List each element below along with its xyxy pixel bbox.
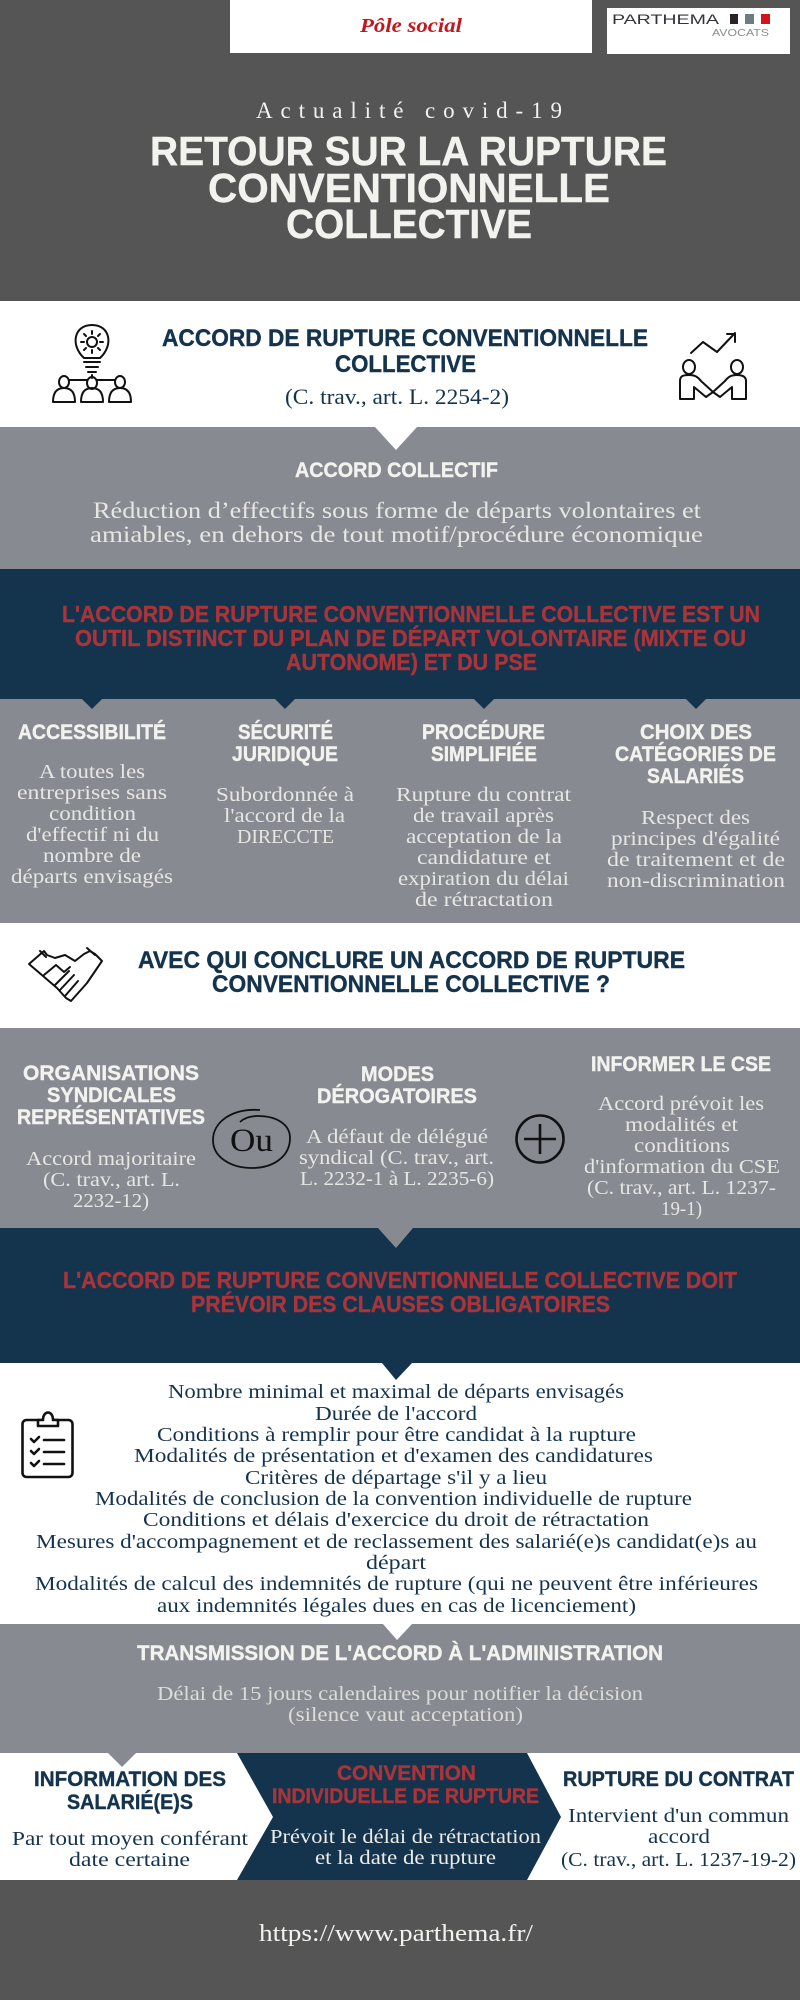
text block: clauses: Modalités de calcul des indemnités de rupture (qui ne peuvent être inférieures [35,1573,758,1595]
column: choix des catégories: de traitement et de [607,849,785,871]
column: accessibilité: départs envisagés [11,866,173,888]
column: sécurité juridique: SÉCURITÉ [238,721,333,744]
arrow: white pointer [375,427,417,450]
text block: (silence vaut acceptation) [288,1704,523,1726]
panel: parties à l'accord [0,1028,800,1228]
text block: clauses: départ [366,1552,427,1574]
column: choix des catégories: CHOIX DES [640,721,752,744]
title [150,128,667,247]
icon: light bulb and team [53,325,131,402]
text block: clauses: Modalités de conclusion de la convention individuelle de rupture [95,1488,692,1510]
title: CONVENTIONNELLE [208,165,610,211]
column: modes dérogatoires [299,1063,494,1190]
heading: AVEC QUI CONCLURE UN ACCORD DE RUPTURE [138,947,685,974]
arrow: grey pointer [378,1228,413,1248]
text block: clauses: aux indemnités légales dues en cas de licenciement) [157,1595,636,1617]
text block: clauses: Nombre minimal et maximal de départs envisagés [168,1381,624,1403]
column: procédure simplifiée [396,721,572,911]
step: information des salariés: SALARIÉ(E)S [67,1791,193,1814]
step: rupture du contrat [561,1768,796,1871]
column: accessibilité: A toutes les [39,761,145,783]
column: procédure simplifiée: acceptation de la [406,826,562,848]
panel: process steps [0,1753,800,1880]
column: procédure simplifiée: expiration du délai [398,868,570,890]
arrow: navy pointer [382,1363,412,1380]
step: convention individuelle de rupture: Prévoit le délai de rétractation [270,1826,541,1848]
column: accessibilité: d'effectif ni du [26,824,159,846]
column: informer le CSE [584,1053,780,1220]
heading: OUTIL DISTINCT DU PLAN DE DÉPART VOLONTAIRE (MIXTE OU [75,624,746,651]
column: modes dérogatoires: L. 2232-1 à L. 2235-6) [300,1168,494,1190]
text block: amiables, en dehors de tout motif/procédure économique [90,522,703,548]
column: sécurité juridique: DIRECCTE [237,826,334,848]
text block: clauses: Critères de départage s'il y a lieu [245,1467,547,1489]
column: accessibilité [11,721,173,888]
panel: footer [0,1880,800,2000]
kicker: Actualité covid-19: Actualité covid-19 [256,98,562,123]
column: sécurité juridique: JURIDIQUE [232,743,338,766]
column: organisations syndicales: REPRÉSENTATIVES [17,1106,205,1129]
heading: COLLECTIVE [335,351,476,378]
panel: clauses obligatoires [0,1228,800,1363]
panel: accord de rupture conventionnelle collective [0,301,800,427]
heading: PRÉVOIR DES CLAUSES OBLIGATOIRES [191,1290,610,1317]
text block: Délai de 15 jours calendaires pour notifier la décision [157,1683,643,1705]
text block [90,498,703,548]
column: choix des catégories: Respect des [641,807,750,829]
text block: clauses: Mesures d'accompagnement et de reclassement des salarié(e)s candidat(e)s au [36,1531,757,1553]
column: modes dérogatoires: DÉROGATOIRES [317,1085,477,1108]
step: information des salariés [12,1768,249,1871]
text block: clauses: Conditions et délais d'exercice du droit de rétractation [143,1509,649,1531]
panel: avec qui conclure [0,923,800,1027]
column: modes dérogatoires: MODES [361,1063,434,1086]
icon: clipboard checklist [22,1412,72,1477]
column: organisations syndicales: Accord majoritaire [26,1148,196,1170]
heading [162,325,648,378]
panel: transmission à l'administration [0,1624,800,1753]
legal reference: (C. trav., art. L. 2254-2) [285,384,509,409]
text block: Réduction d’effectifs sous forme de départs volontaires et [93,498,702,524]
column: organisations syndicales [17,1062,205,1212]
column: informer le CSE: d'information du CSE [584,1156,780,1178]
column: accessibilité: ACCESSIBILITÉ [18,721,166,744]
column: informer le CSE: Accord prévoit les [598,1093,764,1115]
heading: AUTONOME) ET DU PSE [286,649,537,675]
website link: https://www.parthema.fr/ [259,1921,533,1947]
text block: clauses: Durée de l'accord [315,1403,477,1425]
column: procédure simplifiée: candidature et [417,847,552,869]
text block: clauses: Modalités de présentation et d'examen des candidatures [134,1445,653,1467]
column: procédure simplifiée: de travail après [413,805,554,827]
step: convention individuelle de rupture: INDIVIDUELLE DE RUPTURE [272,1785,539,1808]
logo: Parthema Avocats: AVOCATS [712,28,769,39]
column: choix des catégories [607,721,785,892]
heading [63,1267,737,1317]
panel: accord collectif [0,427,800,569]
step: rupture du contrat: accord [648,1826,710,1848]
column: procédure simplifiée: de rétractation [415,889,553,911]
column: procédure simplifiée: SIMPLIFIÉE [431,743,537,766]
heading: CONVENTIONNELLE COLLECTIVE ? [212,971,610,998]
step: rupture du contrat: (C. trav., art. L. 1237-19-2) [561,1849,796,1871]
icon: Ou [213,1110,290,1168]
column: organisations syndicales: (C. trav., art. L. [43,1169,180,1191]
logo: Parthema Avocats: PARTHEMA [612,11,720,27]
step: rupture du contrat: Intervient d'un commun [568,1805,789,1827]
icon: handshake with rising chart [680,333,746,399]
logo: Parthema Avocats [607,8,790,54]
label box: Pôle social: Pôle social [359,15,462,37]
column: informer le CSE: (C. trav., art. L. 1237- [587,1177,776,1199]
arrows: navy pointers [82,699,706,709]
step: convention individuelle de rupture: et la date de rupture [315,1847,496,1869]
column: choix des catégories: SALARIÉS [647,765,744,788]
column: sécurité juridique [216,721,354,848]
text block [157,1683,643,1726]
icon: Ou: Ou [230,1123,273,1159]
column: modes dérogatoires: A défaut de délégué [306,1126,488,1148]
text block: clauses: Conditions à remplir pour être candidat à la rupture [157,1424,636,1446]
column: informer le CSE: 19-1) [661,1198,702,1220]
heading: ACCORD COLLECTIF [295,459,498,482]
step: information des salariés: date certaine [69,1849,190,1871]
heading: L'ACCORD DE RUPTURE CONVENTIONNELLE COLLECTIVE EST UN [62,601,760,627]
arrow: grey pointer [108,1753,136,1767]
column: accessibilité: nombre de [43,845,141,867]
column: choix des catégories: principes d'égalité [611,828,780,850]
panel: header [0,0,800,301]
panel: list of clauses [0,1363,800,1624]
step: information des salariés: INFORMATION DES [34,1768,226,1791]
column: sécurité juridique: Subordonnée à [216,784,354,806]
step: convention individuelle de rupture [237,1753,561,1880]
panel: outil distinct [0,569,800,699]
column: procédure simplifiée: PROCÉDURE [422,721,545,744]
column: sécurité juridique: l'accord de la [224,805,345,827]
column: organisations syndicales: 2232-12) [73,1190,149,1212]
icon: handshake [29,948,102,1001]
heading: ACCORD DE RUPTURE CONVENTIONNELLE [162,325,648,352]
column: choix des catégories: non-discrimination [607,870,785,892]
text block: clauses [35,1381,758,1617]
label box: Pôle social [230,0,592,53]
column: procédure simplifiée: Rupture du contrat [396,784,572,806]
column: informer le CSE: INFORMER LE CSE [591,1053,771,1076]
heading [62,601,760,675]
panel: four characteristics [0,699,800,923]
heading: L'ACCORD DE RUPTURE CONVENTIONNELLE COLLECTIVE DOIT [63,1267,737,1293]
column: choix des catégories: CATÉGORIES DE [615,743,776,766]
column: organisations syndicales: SYNDICALES [47,1084,176,1107]
step: information des salariés: Par tout moyen conférant [12,1828,249,1850]
arrow: white pointer [383,1624,412,1640]
title: COLLECTIVE [286,201,532,247]
column: informer le CSE: conditions [634,1135,730,1157]
heading: TRANSMISSION DE L'ACCORD À L'ADMINISTRATION [137,1642,663,1665]
icon: plus [516,1116,564,1162]
column: modes dérogatoires: syndical (C. trav., art. [299,1147,494,1169]
column: informer le CSE: modalités et [625,1114,739,1136]
column: accessibilité: condition [49,803,136,825]
column: accessibilité: entreprises sans [17,782,167,804]
step: convention individuelle de rupture: CONVENTION [337,1762,476,1785]
title: RETOUR SUR LA RUPTURE [150,128,667,174]
column: organisations syndicales: ORGANISATIONS [23,1062,199,1085]
heading [138,947,685,998]
